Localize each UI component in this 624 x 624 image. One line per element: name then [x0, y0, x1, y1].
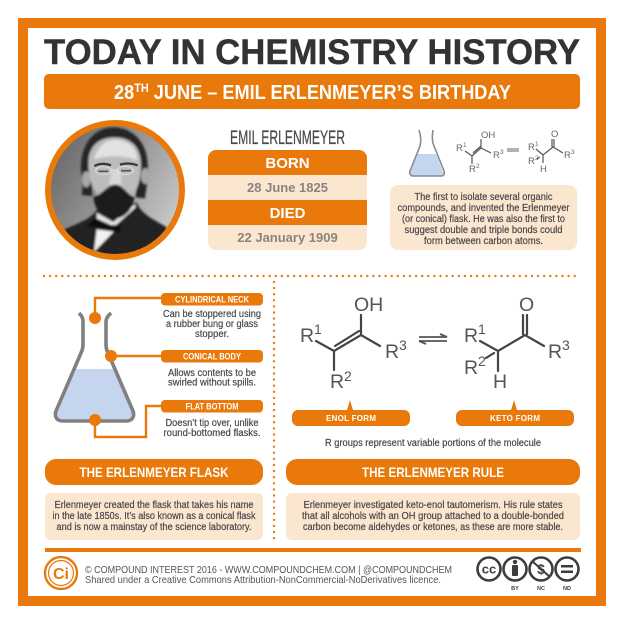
Creative Commons licence icons: [478, 558, 578, 592]
biography text box: (or conical) flask. He was also the first to: [402, 214, 565, 225]
biography text box: suggest double and triple bonds could: [404, 225, 562, 236]
born and died table: DIED: [270, 205, 306, 222]
small tautomerism reaction: 3: [500, 149, 504, 156]
small tautomerism reaction: R: [469, 164, 476, 175]
face: [88, 137, 141, 203]
callout: flat bottom: [161, 400, 263, 439]
spectacles: [95, 166, 133, 175]
hair: [81, 127, 148, 198]
diagram: enol form structure: [300, 294, 407, 393]
callout: conical body: [161, 350, 263, 388]
label: keto form: KETO FORM: [490, 414, 540, 423]
text box: rule: that all alcohols with an OH group attached to a double-bonded: [302, 511, 564, 522]
diagram: labelled Erlenmeyer flask: [55, 293, 263, 439]
label: keto form: [456, 400, 574, 426]
shirt: [94, 229, 114, 252]
born and died table: BORN: [265, 155, 310, 172]
small tautomerism reaction: OH: [481, 130, 495, 141]
callout: conical body: CONICAL BODY: [183, 352, 241, 362]
title: TODAY IN CHEMISTRY HISTORY: [44, 33, 580, 72]
callout connectors: [95, 298, 165, 437]
flask liquid: [56, 369, 133, 420]
caption: R groups represent variable portions of the molecule: [325, 438, 542, 449]
date banner: [44, 74, 580, 109]
brows: [94, 163, 138, 166]
date banner: JUNE – EMIL ERLENMEYER’S BIRTHDAY: [149, 82, 512, 104]
small tautomerism reaction: 3: [571, 149, 575, 156]
small tautomerism reaction: R: [456, 143, 463, 154]
callout: flat bottom: FLAT BOTTOM: [186, 402, 238, 412]
text box: flask: [45, 493, 263, 540]
coat: [64, 203, 167, 260]
diagram: keto form structure: R: [464, 357, 478, 379]
diagram: enol form structure: R: [330, 371, 344, 393]
heading: the Erlenmeyer flask: [45, 459, 263, 485]
bow tie: [88, 220, 120, 232]
diagram: enol form structure: R: [385, 341, 399, 363]
icon: Compound Interest logo: [45, 557, 77, 589]
small tautomerism reaction: R: [493, 150, 500, 161]
text box: rule: Erlenmeyer investigated keto-enol tautomerism. His rule states: [304, 500, 563, 511]
diagram: keto form structure: 3: [562, 337, 570, 353]
callout: cylindrical neck: CYLINDRICAL NECK: [175, 294, 250, 304]
callout: cylindrical neck: Can be stoppered using: [163, 309, 261, 320]
diagram: enol form structure: 3: [399, 337, 407, 353]
Creative Commons licence icons: BY: [511, 586, 519, 592]
text box: rule: [286, 493, 580, 540]
callout: conical body: Allows contents to be: [168, 368, 257, 379]
small tautomerism reaction: R: [528, 142, 535, 153]
heading: the Erlenmeyer rule: THE ERLENMEYER RULE: [362, 464, 504, 480]
born and died table: 28 June 1825: [247, 180, 328, 195]
biography text box: form between carbon atoms.: [424, 236, 543, 247]
diagram: keto form structure: [464, 294, 570, 393]
icon: small flask: [410, 130, 444, 176]
callout: flat bottom: Doesn’t tip over, unlike: [166, 418, 259, 429]
small tautomerism reaction: 2: [476, 163, 480, 170]
footer credits: Shared under a Creative Commons Attribution-NonCommercial-NoDerivatives licence.: [85, 574, 441, 586]
diagram: enol form structure: 1: [314, 321, 322, 337]
diagram: enol form structure: R: [300, 325, 314, 347]
diagram: enol form structure: OH: [354, 294, 383, 316]
footer credits: © COMPOUND INTEREST 2016 - WWW.COMPOUNDCHEM.COM | @COMPOUNDCHEM: [85, 564, 452, 576]
small tautomerism reaction: R: [564, 150, 571, 161]
eyes: [98, 170, 131, 172]
text box: rule: carbon become aldehydes or ketones, as these are more stable.: [303, 522, 563, 533]
callout: cylindrical neck: [161, 293, 263, 340]
heading: the Erlenmeyer flask: THE ERLENMEYER FLASK: [80, 464, 228, 480]
callout: conical body: swirled without spills.: [168, 378, 256, 388]
diagram: enol form structure: 2: [344, 368, 352, 384]
text box: flask: and is now a mainstay of the science laboratory.: [56, 522, 252, 533]
biography text box: compounds, and invented the Erlenmeyer: [398, 203, 570, 214]
collar: [97, 204, 136, 227]
Creative Commons licence icons: NC: [537, 586, 545, 592]
diagram: keto form structure: R: [548, 341, 562, 363]
diagram: keto form structure: O: [519, 294, 534, 316]
diagram: keto form structure: 2: [478, 353, 486, 369]
small tautomerism reaction: 2: [535, 155, 539, 162]
born and died table: 22 January 1909: [237, 230, 338, 245]
small tautomerism reaction: [456, 129, 575, 175]
Creative Commons licence icons: ND: [563, 586, 571, 592]
label: enol form: [292, 400, 410, 426]
callout: flat bottom: round-bottomed flasks.: [164, 428, 260, 439]
footer credits: [85, 564, 452, 586]
born and died table: [208, 150, 367, 250]
small tautomerism reaction: 1: [535, 141, 539, 148]
biography text box: [390, 185, 577, 250]
date banner: 28: [114, 82, 136, 104]
icon: Compound Interest logo: Ci: [53, 566, 69, 583]
equilibrium arrows: [419, 334, 447, 344]
small tautomerism reaction: H: [540, 164, 547, 175]
diagram: keto form structure: R: [464, 325, 478, 347]
label: enol form: ENOL FORM: [326, 414, 376, 423]
Creative Commons licence icons: $: [537, 561, 545, 577]
callout: cylindrical neck: stopper.: [195, 329, 229, 340]
small tautomerism reaction: R: [528, 156, 535, 167]
text box: flask: in the late 1850s. It’s also known as a conical flask: [52, 511, 256, 522]
ears: [82, 171, 91, 187]
diagram: keto form structure: 1: [478, 321, 486, 337]
small tautomerism reaction: 1: [463, 142, 467, 149]
beard: [93, 185, 134, 219]
flask outline: [55, 313, 134, 421]
heading: the Erlenmeyer rule: [286, 459, 580, 485]
biography text box: The first to isolate several organic: [414, 192, 553, 203]
portrait of Emil Erlenmeyer: [45, 120, 185, 260]
small tautomerism reaction: O: [551, 129, 558, 140]
diagram: keto form structure: H: [493, 371, 507, 393]
callout: cylindrical neck: a rubber bung or glass: [166, 319, 258, 330]
Creative Commons licence icons: cc: [482, 562, 496, 576]
date banner: TH: [134, 81, 149, 95]
name heading: EMIL ERLENMEYER: [230, 127, 345, 149]
text box: flask: Erlenmeyer created the flask that takes his name: [54, 500, 254, 511]
